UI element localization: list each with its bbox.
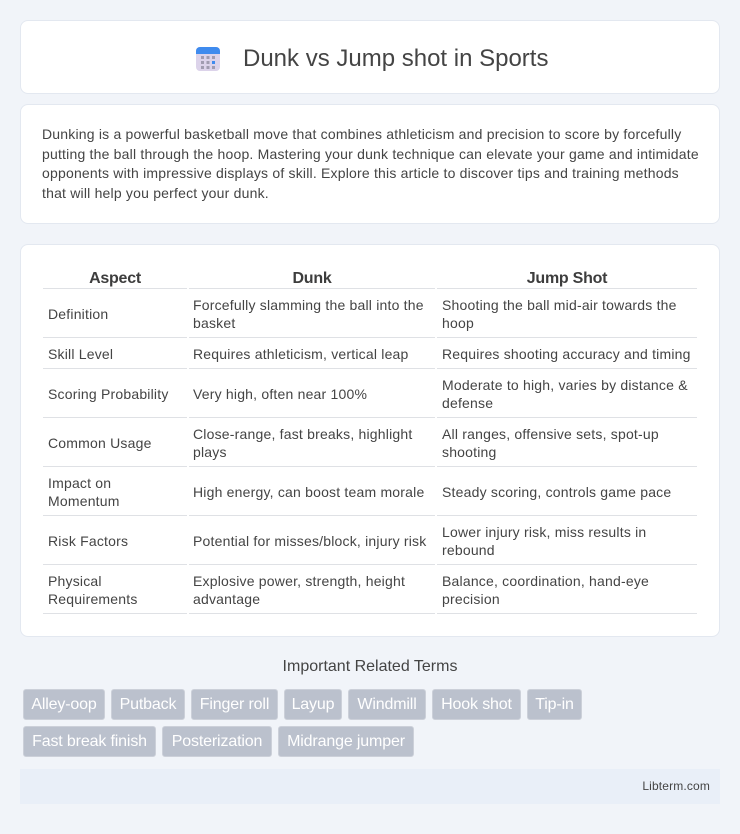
related term tags: Windmill [357, 696, 417, 713]
table header: Jump Shot [527, 270, 607, 287]
related term tags: Alley-oop [31, 696, 97, 713]
row: Definition: Shooting the ball mid-air towards the [442, 297, 677, 313]
related term tags: Finger roll [200, 696, 269, 713]
row: Common Usage: All ranges, offensive sets, spot-up [442, 426, 659, 442]
related term tags [23, 689, 582, 757]
row: Risk Factors: Lower injury risk, miss results in [442, 524, 646, 540]
row: Common Usage: Common Usage [48, 435, 152, 451]
icon: calendar [196, 47, 220, 71]
row: Skill Level: Requires shooting accuracy and timing [442, 346, 691, 362]
related term tags: Posterization [172, 733, 262, 750]
row: Definition: Forcefully slamming the ball into the [193, 297, 424, 313]
panel: comparison table [20, 244, 720, 637]
row: Definition: basket [193, 315, 235, 331]
heading: related terms: Important Related Terms [283, 658, 457, 675]
row: Common Usage: shooting [442, 444, 497, 460]
row: Physical Requirements: Requirements [48, 591, 138, 607]
row: Scoring Probability [48, 377, 688, 411]
title: Dunk vs Jump shot in Sports [243, 45, 548, 72]
row: Common Usage: Close-range, fast breaks, highlight [193, 426, 412, 442]
related term tags: Layup [292, 696, 334, 713]
panel: header [20, 20, 720, 94]
row: Physical Requirements: Physical [48, 573, 102, 589]
row: Scoring Probability: Moderate to high, varies by distance & [442, 377, 688, 393]
panel: description [20, 104, 720, 224]
row: Impact on Momentum: Steady scoring, controls game pace [442, 484, 671, 500]
description text: opponents with impressive displays of skill. Explore this article to discover tips and training methods [42, 165, 679, 181]
row: Common Usage: plays [193, 444, 227, 460]
row: Physical Requirements: Explosive power, strength, height [193, 573, 405, 589]
row: Physical Requirements: advantage [193, 591, 260, 607]
row: Risk Factors [48, 524, 646, 558]
description text: that will help you perfect your dunk. [42, 184, 269, 200]
footer bar [20, 769, 720, 804]
table header [89, 270, 608, 287]
row: Risk Factors: Potential for misses/block, injury risk [193, 533, 426, 549]
row: Risk Factors: rebound [442, 542, 495, 558]
related term tags: Midrange jumper [287, 733, 405, 750]
footer credit: Libterm.com [642, 779, 710, 793]
row: Impact on Momentum: Impact on [48, 475, 111, 491]
description text [42, 126, 699, 201]
row: Physical Requirements: Balance, coordination, hand-eye [442, 573, 649, 589]
row: Skill Level: Requires athleticism, vertical leap [193, 346, 409, 362]
related term tags: Fast break finish [32, 733, 147, 750]
description text: putting the ball through the hoop. Mastering your dunk technique can elevate your game and intimidate [42, 146, 699, 162]
row: Definition [48, 297, 677, 331]
related term tags: Tip-in [535, 696, 574, 713]
row: Common Usage [48, 426, 659, 460]
description text: Dunking is a powerful basketball move that combines athleticism and precision to score by forcefully [42, 126, 681, 142]
related term tags: Hook shot [441, 696, 512, 713]
related term tags: Putback [120, 696, 176, 713]
row: Scoring Probability: Very high, often near 100% [193, 386, 367, 402]
row: Risk Factors: Risk Factors [48, 533, 128, 549]
row: Impact on Momentum [48, 475, 671, 509]
row: Scoring Probability: Scoring Probability [48, 386, 169, 402]
row: Skill Level [48, 346, 691, 362]
row: Impact on Momentum: High energy, can boost team morale [193, 484, 424, 500]
row: Impact on Momentum: Momentum [48, 493, 120, 509]
row: Scoring Probability: defense [442, 395, 493, 411]
row: Physical Requirements [48, 573, 649, 607]
row: Definition: hoop [442, 315, 474, 331]
row: Skill Level: Skill Level [48, 346, 113, 362]
row: Physical Requirements: precision [442, 591, 500, 607]
row: Definition: Definition [48, 306, 108, 322]
table header: Dunk [292, 270, 332, 287]
table header: Aspect [89, 270, 141, 287]
